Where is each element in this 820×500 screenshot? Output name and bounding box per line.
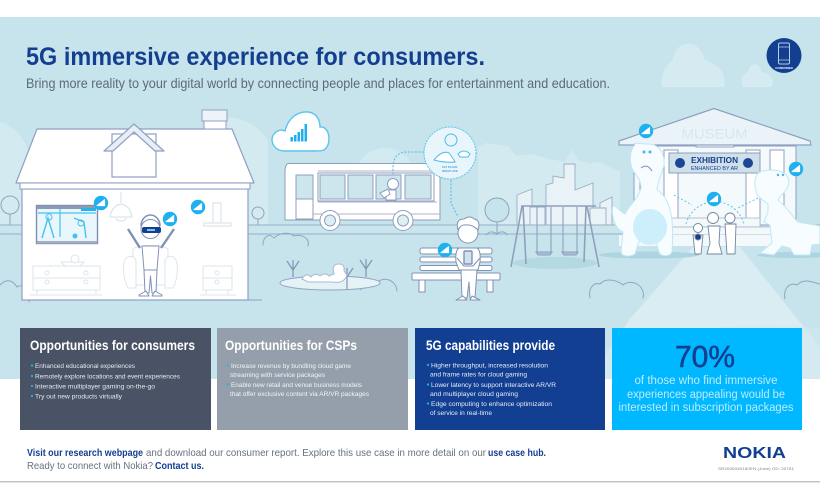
dormer (104, 124, 164, 177)
brontosaurus (599, 143, 699, 258)
family (693, 212, 736, 254)
router on shelf (204, 203, 231, 226)
subtitle: Bring more reality to your digital world by connecting people and places for entertainment and education. (26, 75, 610, 91)
museum name: MUSEUM (682, 126, 748, 142)
bus door and stripes (296, 171, 440, 219)
boy (456, 217, 480, 300)
television showing game (36, 206, 98, 244)
footer links: use case hub. (488, 447, 546, 459)
museum (599, 108, 820, 258)
road (0, 225, 820, 234)
person wearing VR headset (128, 215, 174, 296)
panel: opportunities for consumers (20, 328, 211, 430)
bullet list: Interactive multiplayer gaming on-the-go (35, 384, 155, 390)
footer links: and download our consumer report. Explore this use case in more detail on our (146, 447, 486, 459)
signal cloud (272, 112, 329, 151)
wifi badges at museum (639, 124, 803, 206)
bullet list: that offer exclusive content via AR/VR packages (230, 391, 370, 398)
bus body (285, 164, 440, 220)
panel heading: Opportunities for consumers (30, 337, 195, 353)
Nokia logo: NOKIA (723, 445, 786, 462)
city skyline (517, 164, 612, 225)
wheels (320, 210, 413, 230)
bullet list: Higher throughput, increased resolution (431, 362, 548, 370)
footer links: Visit our research webpage (27, 447, 143, 459)
exhibition banner (669, 153, 760, 173)
AR beams (674, 195, 758, 224)
footer links (27, 447, 546, 472)
floor line (122, 299, 262, 301)
bus passenger (380, 178, 398, 200)
icon: phone badge (766, 38, 802, 73)
bullet list: Lower latency to support interactive AR/VR (431, 382, 556, 389)
background scenery (0, 44, 773, 230)
tyrannosaurus (755, 170, 820, 258)
bullet list: streaming with service packages (230, 372, 326, 379)
bottom rule (0, 481, 820, 482)
bullet list: Remotely explore locations and event experiences (35, 374, 181, 380)
roof (16, 129, 254, 183)
ceiling lamp (110, 192, 132, 221)
bullet list (31, 363, 181, 400)
bullet list: Edge computing to enhance optimization (431, 401, 552, 408)
bus windows (296, 175, 431, 199)
panel: 70 percent statistic (612, 328, 802, 430)
bullet list: Enable new retail and venue business models (231, 382, 363, 389)
panel: opportunities for CSPs (217, 328, 408, 430)
exhibition banner: EXHIBITION (691, 156, 738, 165)
left dresser with bowl (30, 255, 102, 295)
bench (412, 248, 500, 292)
document code: SR2006040150EN (June) OD: 20751 (718, 467, 794, 471)
panel: 5G capabilities (415, 328, 605, 430)
big number: 70% (675, 339, 735, 374)
footer links: Contact us. (155, 460, 204, 472)
background trees (1, 196, 509, 235)
bus (285, 164, 440, 230)
armchair (124, 246, 177, 288)
background panel (0, 17, 820, 379)
title: 5G immersive experience for consumers. (26, 43, 485, 71)
bench with boy and phone (412, 217, 500, 300)
right dresser (200, 266, 236, 295)
AR racing bubble: 1ST PLACE (442, 165, 458, 169)
museum steps (619, 218, 791, 246)
statistic description: interested in subscription packages (618, 402, 794, 414)
AR racing bubble: 2ND PLACE (442, 169, 458, 173)
lower ground highlights (540, 247, 820, 379)
wifi badges in house (94, 196, 205, 226)
statistic description: of those who find immersive (634, 375, 778, 387)
wifi badge on bench (438, 243, 452, 257)
bushes (0, 232, 820, 302)
exhibition banner: ENHANCED BY AR (691, 166, 738, 172)
icon: phone badge: CONSUMER (775, 66, 794, 70)
bullet list: and multiplayer cloud gaming (430, 391, 518, 398)
museum building (634, 128, 796, 225)
house (16, 110, 262, 300)
wall (22, 189, 248, 300)
bullet list (227, 363, 370, 398)
pediment roof (619, 108, 811, 145)
chimney (202, 110, 227, 129)
bullet list: of service in real-time (430, 410, 492, 417)
panel heading: 5G capabilities provide (426, 337, 555, 353)
bullet list: Try out new products virtually (35, 394, 123, 400)
bullet list: Enhanced educational experiences (35, 363, 136, 370)
bullet list: Increase revenue by bundling cloud game (231, 363, 351, 370)
bullet list: and frame rates for cloud gaming (430, 372, 527, 378)
bullet list (427, 362, 556, 417)
pond with ducks (280, 259, 380, 290)
footer links: Ready to connect with Nokia? (27, 460, 153, 472)
statistic description (618, 375, 794, 414)
statistic description: experiences appealing would be (627, 389, 785, 401)
AR racing bubble (393, 127, 476, 217)
swing set (511, 206, 599, 269)
panel heading: Opportunities for CSPs (225, 337, 357, 353)
